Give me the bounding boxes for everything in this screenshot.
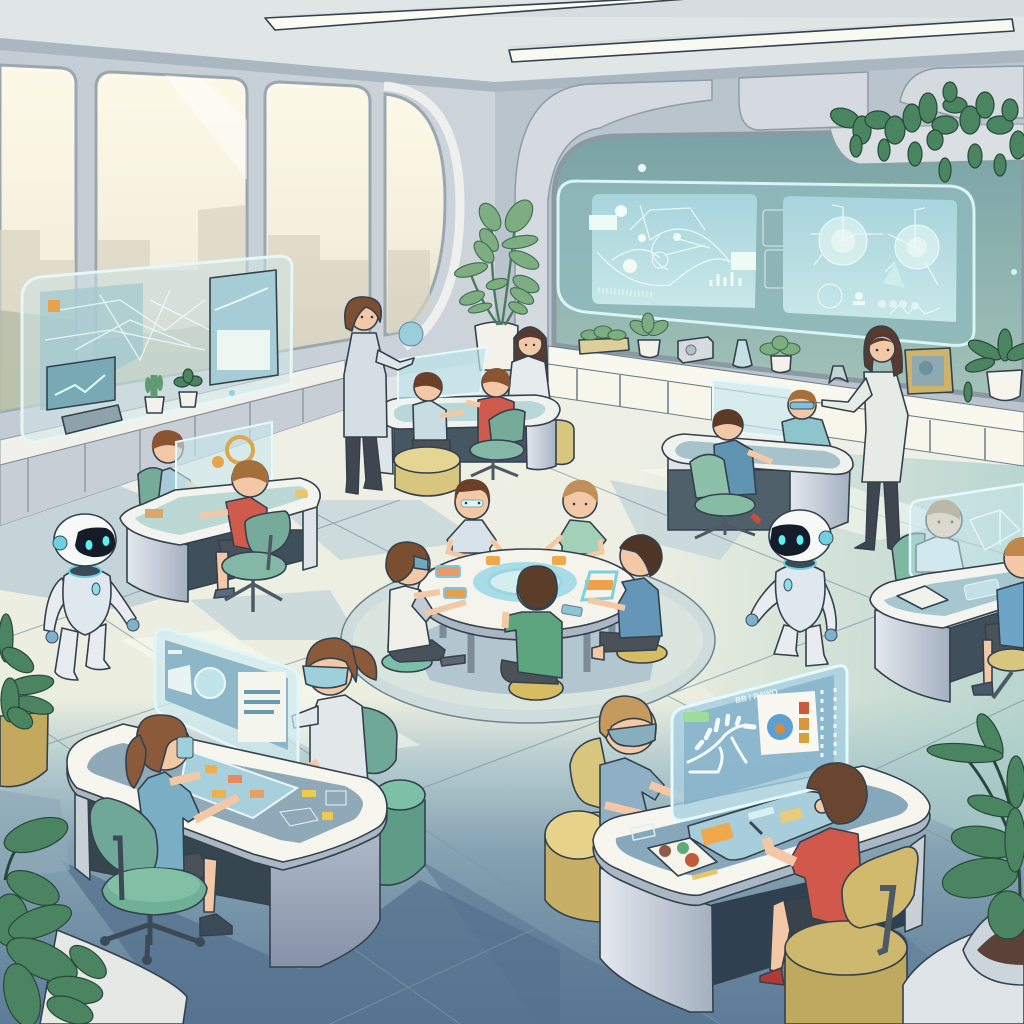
pedestal xyxy=(875,610,950,702)
kid back right xyxy=(540,480,606,558)
ceiling light right xyxy=(509,19,1014,62)
ponytail girl xyxy=(126,715,238,936)
kid behind panel xyxy=(916,500,964,572)
goggles girl chair and ottoman xyxy=(362,707,425,885)
kid pale shirt xyxy=(412,372,464,452)
front left desk group xyxy=(67,629,425,967)
pedestal xyxy=(127,505,317,602)
right mid desk group xyxy=(870,484,1024,702)
green chair xyxy=(470,409,525,480)
teal wall display niche xyxy=(554,130,1024,400)
boy with goggles xyxy=(600,696,690,830)
desk top xyxy=(593,766,930,905)
ceiling xyxy=(0,0,1024,110)
center tall plant xyxy=(453,195,542,370)
back right desk group xyxy=(662,380,853,538)
teacher right xyxy=(822,326,908,553)
desk top xyxy=(67,724,387,870)
wall holographic screen xyxy=(558,164,1017,345)
bottom right plant xyxy=(903,710,1024,1024)
kid behind xyxy=(150,430,206,510)
floor xyxy=(0,395,1024,1024)
seated teacher girl xyxy=(508,327,550,400)
small gadget xyxy=(829,366,848,383)
kid red shirt xyxy=(466,368,514,445)
pot plant 2 xyxy=(760,336,800,372)
girl with goggles xyxy=(292,638,376,783)
right robot xyxy=(746,510,837,666)
kid back left xyxy=(447,479,506,558)
yellow chair and ottoman xyxy=(545,738,615,922)
circular rug xyxy=(341,557,715,723)
back center desk group xyxy=(375,327,574,496)
right wall xyxy=(495,62,1024,420)
holo panel xyxy=(176,422,272,512)
bottom left plant xyxy=(0,811,187,1024)
desk xyxy=(375,395,560,474)
holo panel xyxy=(910,484,1024,578)
green chair xyxy=(690,454,760,538)
projector box xyxy=(62,405,122,434)
map panel xyxy=(589,194,757,308)
desk top xyxy=(120,478,320,545)
speaker cube xyxy=(678,337,713,363)
front right desk group xyxy=(545,666,930,1024)
left window holographic panel xyxy=(22,256,292,442)
left counter xyxy=(0,360,345,526)
dinosaur holo panel xyxy=(672,666,847,820)
desk top xyxy=(870,560,1024,628)
hanging plant xyxy=(828,82,1024,182)
glass device xyxy=(733,340,752,368)
left robot xyxy=(44,514,139,680)
left mid desk group xyxy=(120,422,320,612)
counter objects xyxy=(579,313,1024,402)
kid right xyxy=(588,535,667,663)
yellow chair xyxy=(785,847,918,1024)
network panel xyxy=(783,196,957,322)
yellow ottoman front xyxy=(394,447,460,496)
dinosaur skeleton xyxy=(688,716,754,772)
kid red shirt xyxy=(200,460,268,598)
right counter xyxy=(548,346,1024,466)
table top xyxy=(418,549,638,640)
windowsill plants xyxy=(62,369,202,434)
left edge plant with pot xyxy=(0,614,55,787)
kid left xyxy=(382,542,466,672)
chair behind xyxy=(892,533,925,580)
teacher with globe xyxy=(344,297,423,494)
small plant pot xyxy=(174,369,202,407)
table legs xyxy=(443,625,612,673)
central text panels xyxy=(763,210,801,288)
picture frame xyxy=(905,348,953,394)
kid blue shirt xyxy=(713,409,772,496)
dinosaur holo panel: BB / RAWO xyxy=(735,687,779,705)
holo panel xyxy=(398,347,487,400)
green chair behind xyxy=(138,468,162,505)
desk xyxy=(662,434,853,534)
center round table group xyxy=(382,479,667,700)
kid front xyxy=(501,566,563,700)
white pot plant xyxy=(964,329,1024,402)
ceiling light left xyxy=(265,0,700,30)
holo panel xyxy=(713,380,812,440)
pedestals and underside xyxy=(600,835,925,1012)
holo panel xyxy=(155,629,298,773)
pot plant 1 xyxy=(627,313,671,358)
left wall xyxy=(0,50,495,440)
kid with goggles xyxy=(782,390,832,450)
boy in red shirt xyxy=(750,763,867,985)
city silhouette xyxy=(0,205,430,410)
wall alcoves xyxy=(515,66,1024,350)
pedestals xyxy=(75,785,380,967)
windows xyxy=(0,65,460,412)
yellow ottoman side xyxy=(556,420,574,464)
green chair xyxy=(90,798,207,965)
planter box xyxy=(579,326,629,354)
cactus pot xyxy=(145,375,164,413)
green chair front xyxy=(222,511,290,612)
kid right edge xyxy=(972,537,1024,698)
